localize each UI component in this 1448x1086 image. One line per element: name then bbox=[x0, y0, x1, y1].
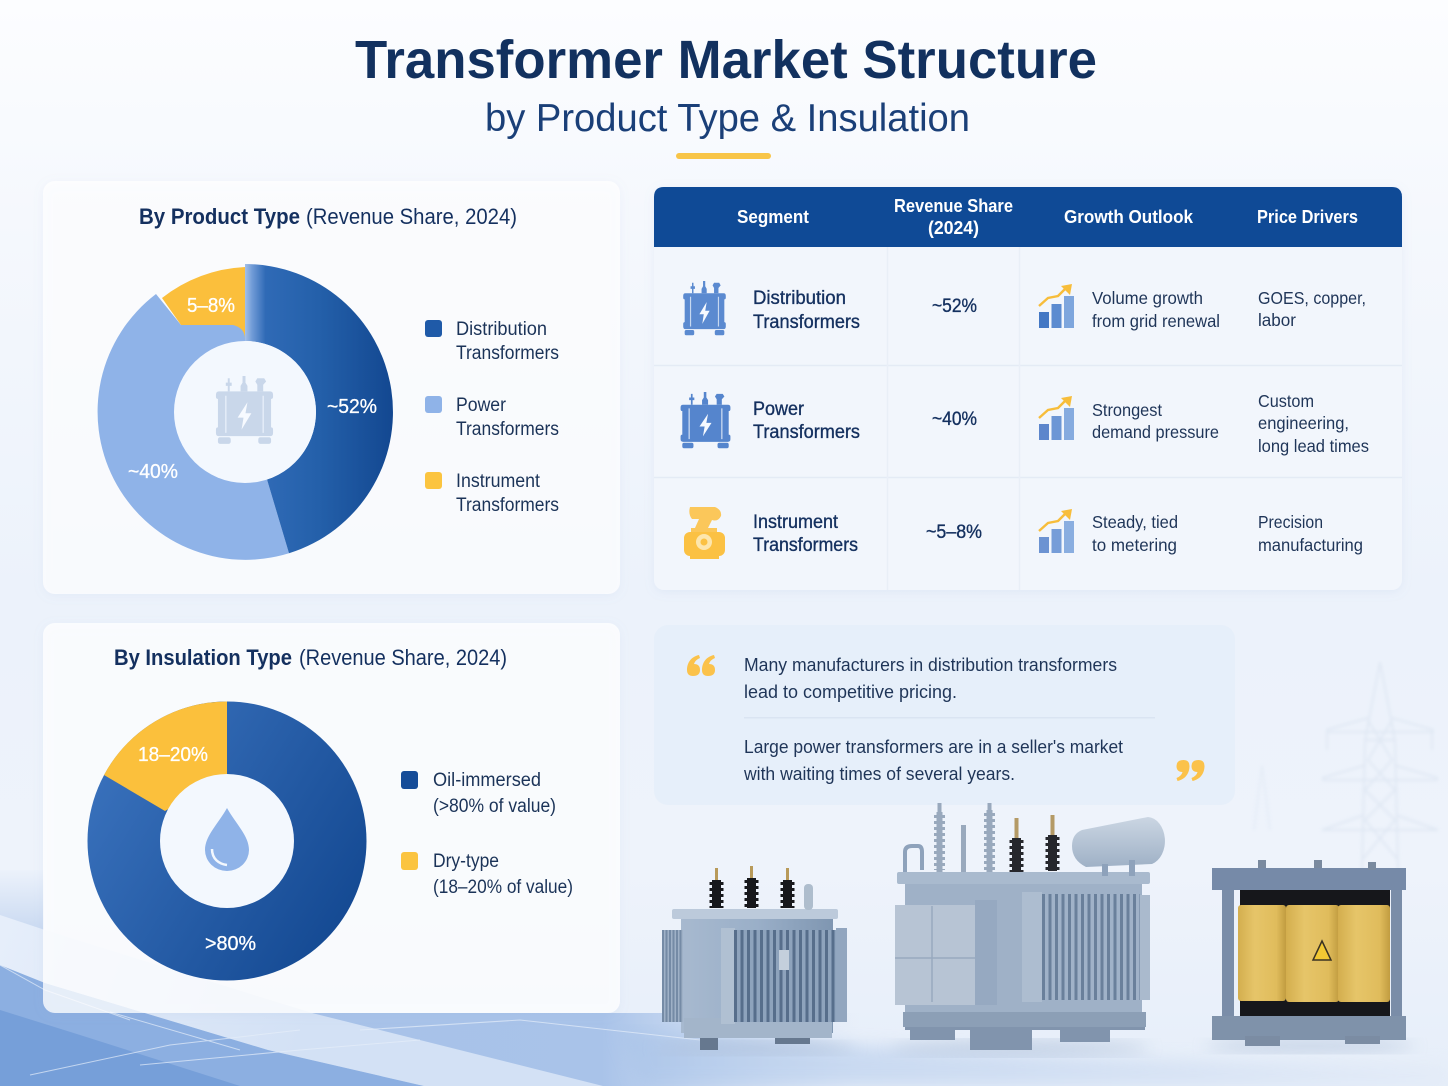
row: instrument transformers: ~5–8% bbox=[926, 522, 982, 543]
bushings bbox=[712, 878, 792, 908]
table header: (2024) bbox=[928, 218, 979, 238]
row: power transformers: ~40% bbox=[932, 409, 977, 430]
icon: instrument transformer bbox=[684, 507, 725, 559]
donut chart: product type: 5–8% bbox=[187, 295, 235, 317]
row: power transformers: demand pressure bbox=[1092, 422, 1219, 442]
row: instrument transformers: Precision bbox=[1258, 512, 1323, 532]
row: distribution transformers: labor bbox=[1258, 310, 1296, 330]
title bbox=[355, 30, 1097, 159]
subtitle: by Product Type & Insulation bbox=[485, 97, 970, 140]
row: instrument transformers bbox=[684, 507, 1363, 559]
legend: insulation type: Dry-type bbox=[433, 851, 499, 872]
legend: product type: Transformers bbox=[456, 419, 559, 440]
icon: growth chart bbox=[1039, 509, 1074, 553]
icon: transformer bbox=[216, 376, 273, 444]
row: instrument transformers: to metering bbox=[1092, 535, 1177, 555]
icon: growth chart bbox=[1039, 396, 1074, 440]
radiators bbox=[662, 930, 683, 1022]
legend: product type: Transformers bbox=[456, 343, 559, 364]
table header: Segment bbox=[737, 207, 809, 227]
legend: product type: Instrument bbox=[456, 471, 541, 492]
conservator tank bbox=[1072, 817, 1165, 867]
table header: Price Drivers bbox=[1257, 207, 1358, 227]
illustration: dry-type transformer bbox=[1205, 860, 1415, 1053]
bushings bbox=[940, 803, 990, 872]
donut chart: product type: ~52% bbox=[327, 396, 377, 418]
legend: product type bbox=[425, 319, 559, 516]
table header bbox=[654, 187, 1402, 247]
legend: insulation type bbox=[401, 770, 573, 898]
row: distribution transformers: Volume growth bbox=[1092, 288, 1203, 308]
table panel bbox=[654, 187, 1402, 590]
row: instrument transformers: Steady, tied bbox=[1092, 512, 1178, 532]
legend: product type: Distribution bbox=[456, 319, 547, 340]
quote text bbox=[743, 654, 1155, 784]
legend: product type: Power bbox=[456, 395, 507, 416]
quote text: with waiting times of several years. bbox=[743, 763, 1015, 784]
panel: by insulation type bbox=[43, 623, 620, 1013]
icon: closing quote bbox=[1176, 760, 1204, 781]
row: instrument transformers: manufacturing bbox=[1258, 535, 1363, 555]
row: power transformers: long lead times bbox=[1258, 436, 1369, 456]
icon: oil drop bbox=[205, 808, 249, 871]
quote text: Many manufacturers in distribution transformers bbox=[744, 654, 1117, 675]
row: distribution transformers: from grid renewal bbox=[1092, 311, 1220, 331]
icon: growth chart bbox=[1039, 284, 1074, 328]
legend: insulation type: (>80% of value) bbox=[433, 796, 556, 817]
warning label bbox=[1313, 941, 1331, 960]
panel heading: By Insulation Type bbox=[114, 645, 292, 670]
row: power transformers: Transformers bbox=[753, 422, 860, 443]
icon: power transformer bbox=[681, 392, 730, 448]
panel heading: By Product Type bbox=[139, 204, 300, 229]
row: instrument transformers: Instrument bbox=[753, 512, 839, 533]
panel heading: (Revenue Share, 2024) bbox=[306, 204, 517, 229]
donut chart: product type: ~40% bbox=[128, 461, 178, 483]
icon: distribution transformer bbox=[683, 281, 726, 335]
quote text: lead to competitive pricing. bbox=[744, 681, 957, 702]
table header: Growth Outlook bbox=[1064, 207, 1194, 227]
legend: insulation type: (18–20% of value) bbox=[433, 877, 573, 898]
illustration: power transformer bbox=[890, 803, 1165, 1056]
row: power transformers: Custom bbox=[1258, 391, 1314, 411]
row: distribution transformers: ~52% bbox=[932, 296, 977, 317]
row: power transformers: Power bbox=[753, 399, 805, 420]
row: distribution transformers: Transformers bbox=[753, 312, 860, 333]
row: power transformers bbox=[681, 391, 1369, 456]
panel: by product type bbox=[43, 181, 620, 594]
icon: opening quote bbox=[687, 655, 715, 676]
row: power transformers: engineering, bbox=[1258, 413, 1349, 433]
row: distribution transformers bbox=[683, 281, 1366, 335]
donut chart: product type bbox=[98, 264, 393, 560]
title accent bbox=[676, 153, 771, 159]
donut chart: insulation type: 18–20% bbox=[138, 744, 208, 766]
quote text: Large power transformers are in a seller's market bbox=[744, 736, 1123, 757]
row: distribution transformers: GOES, copper, bbox=[1258, 288, 1366, 308]
legend: insulation type: Oil-immersed bbox=[433, 770, 541, 791]
table header: Revenue Share bbox=[894, 196, 1013, 216]
row: instrument transformers: Transformers bbox=[753, 535, 858, 556]
donut chart: insulation type: >80% bbox=[205, 933, 256, 955]
legend: product type: Transformers bbox=[456, 495, 559, 516]
panel heading: (Revenue Share, 2024) bbox=[299, 645, 507, 670]
donut chart: insulation type bbox=[88, 701, 366, 980]
title: Transformer Market Structure bbox=[355, 30, 1097, 90]
row: power transformers: Strongest bbox=[1092, 400, 1162, 420]
transmission tower backdrop bbox=[1254, 662, 1438, 870]
quote panel bbox=[654, 625, 1235, 805]
illustration: distribution transformer bbox=[655, 866, 855, 1055]
row: distribution transformers: Distribution bbox=[753, 288, 846, 309]
